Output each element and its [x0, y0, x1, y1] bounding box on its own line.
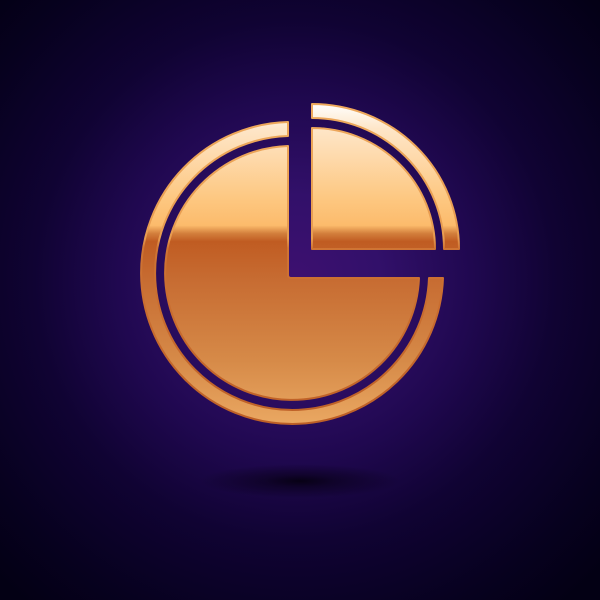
small quarter pie slice: [312, 128, 435, 249]
icon: gold pie chart: [141, 104, 459, 424]
large outer ring segment: [141, 122, 443, 424]
ground shadow: [200, 464, 400, 498]
large pie slice: [165, 146, 419, 400]
small outer ring segment: [312, 104, 459, 249]
